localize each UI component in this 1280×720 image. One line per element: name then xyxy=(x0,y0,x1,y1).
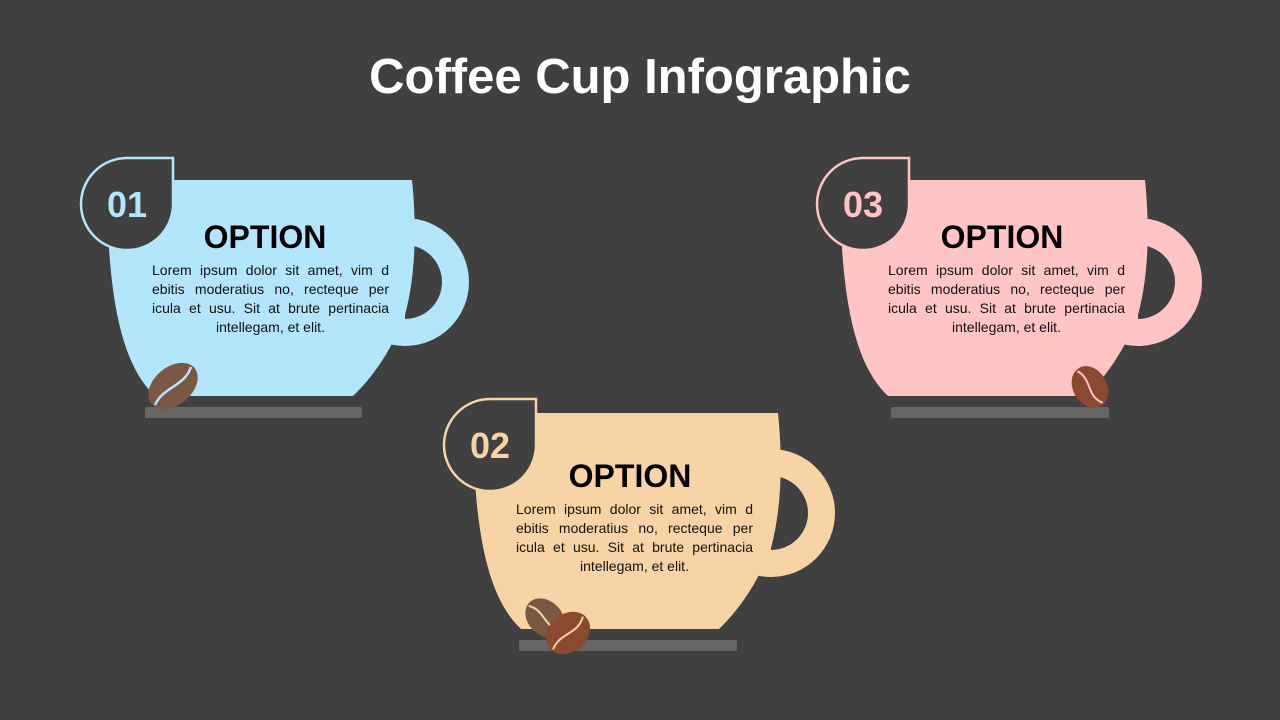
cup 03 text: icula et usu. Sit at brute pertinacia xyxy=(888,300,1125,316)
cup 02 text: ebitis moderatius no, recteque per xyxy=(516,520,753,536)
cup 03 xyxy=(817,158,1202,418)
cup 03 text: intellegam, et elit. xyxy=(952,319,1061,335)
cup 02 text: Lorem ipsum dolor sit amet, vim d xyxy=(516,501,753,517)
cup 01 text: intellegam, et elit. xyxy=(216,319,325,335)
cup 03 text: Lorem ipsum dolor sit amet, vim d xyxy=(888,262,1125,278)
cup 01 xyxy=(81,158,469,419)
cup 02 heading: OPTION xyxy=(569,458,691,494)
cup 01 text xyxy=(152,262,390,335)
cup 02 text: intellegam, et elit. xyxy=(580,558,689,574)
cup 03: 03 xyxy=(843,184,883,225)
cup 01 text: icula et usu. Sit at brute pertinacia xyxy=(152,300,389,316)
cup 02: 02 xyxy=(470,425,510,466)
cup 01 text: Lorem ipsum dolor sit amet, vim d xyxy=(152,262,389,278)
cup 01 text: ebitis moderatius no, recteque per xyxy=(152,281,389,297)
cup 03 text xyxy=(888,262,1126,335)
cup 03 text: ebitis moderatius no, recteque per xyxy=(888,281,1125,297)
cup 02 text: icula et usu. Sit at brute pertinacia xyxy=(516,539,753,555)
cup 03 heading: OPTION xyxy=(941,219,1063,255)
cup 01: 01 xyxy=(107,184,147,225)
cup 01 heading: OPTION xyxy=(204,219,326,255)
title: Coffee Cup Infographic xyxy=(369,50,911,104)
cup 02 xyxy=(444,399,835,663)
cup 02 text xyxy=(516,501,754,574)
